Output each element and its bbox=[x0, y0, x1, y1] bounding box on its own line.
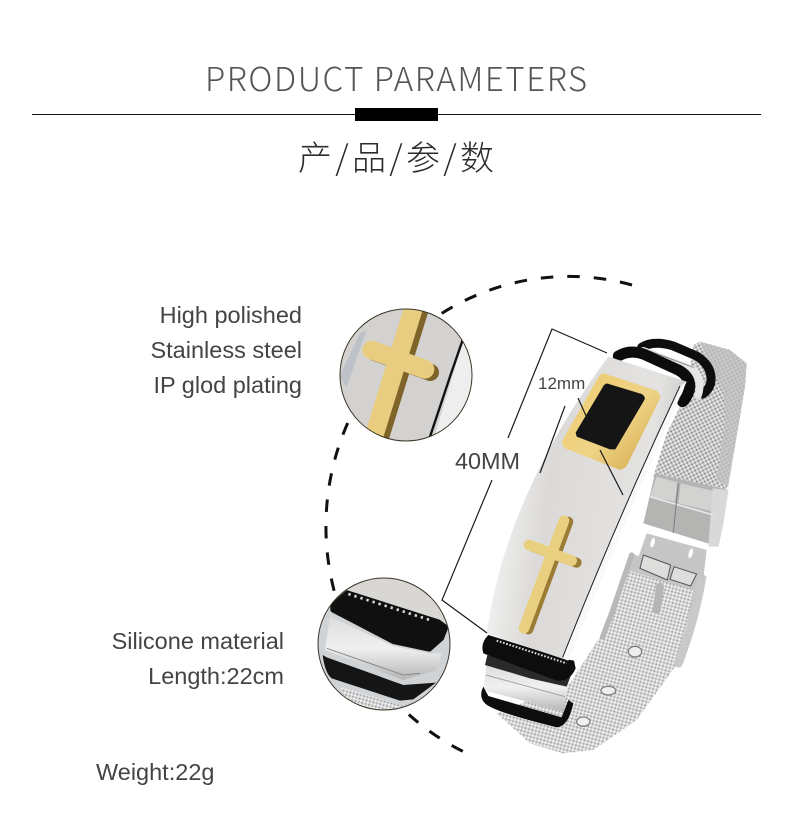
buckle base bbox=[603, 553, 707, 663]
label: 12mm: 12mm bbox=[538, 374, 585, 393]
text: steel and plating description: IP glod plating bbox=[153, 372, 302, 398]
gold rectangle inlay bbox=[562, 373, 660, 470]
lens 2 outline bbox=[318, 578, 450, 710]
bottom steel end bbox=[483, 663, 568, 712]
label: 40MM: 40MM bbox=[455, 448, 520, 474]
buckle frame bbox=[603, 555, 702, 663]
dashed circle arc bbox=[326, 276, 632, 757]
bracelet photo bbox=[481, 342, 747, 753]
clasp link bbox=[638, 473, 728, 586]
text: steel and plating description: Stainless steel bbox=[150, 337, 302, 363]
dimension lines bbox=[442, 329, 623, 633]
title divider with black bar bbox=[32, 108, 761, 121]
gold cross on plate bbox=[524, 521, 577, 629]
lens: gold cross detail bbox=[340, 310, 472, 440]
lens 1 outline bbox=[340, 309, 472, 441]
bottom silicone rings bbox=[481, 635, 576, 727]
steel plate bbox=[487, 357, 687, 661]
infographic canvas bbox=[32, 66, 761, 785]
text: silicone description: Length:22cm bbox=[148, 663, 284, 689]
title: product parameters: PRODUCT PARAMETERS bbox=[205, 53, 587, 101]
lower mesh strap bbox=[497, 570, 693, 753]
bevel black line bbox=[563, 386, 680, 657]
text: silicone description bbox=[112, 628, 284, 689]
Chinese subtitle: 产/品/参/数 bbox=[298, 131, 494, 180]
bottom dotted edge bbox=[497, 641, 567, 663]
text: steel and plating description bbox=[150, 302, 302, 398]
text: silicone description: Silicone material bbox=[112, 628, 284, 654]
black leather inset bbox=[576, 383, 645, 449]
text: steel and plating description: High polished bbox=[160, 302, 302, 328]
top silicone rings and steel end bbox=[618, 343, 711, 402]
text: weight: Weight:22g bbox=[96, 759, 214, 785]
white plate bevel bbox=[563, 382, 687, 661]
upper mesh strap bbox=[653, 342, 747, 490]
strap holes bbox=[577, 646, 642, 726]
strap metal edge bbox=[700, 342, 747, 487]
lens: silicone detail bbox=[318, 578, 450, 710]
